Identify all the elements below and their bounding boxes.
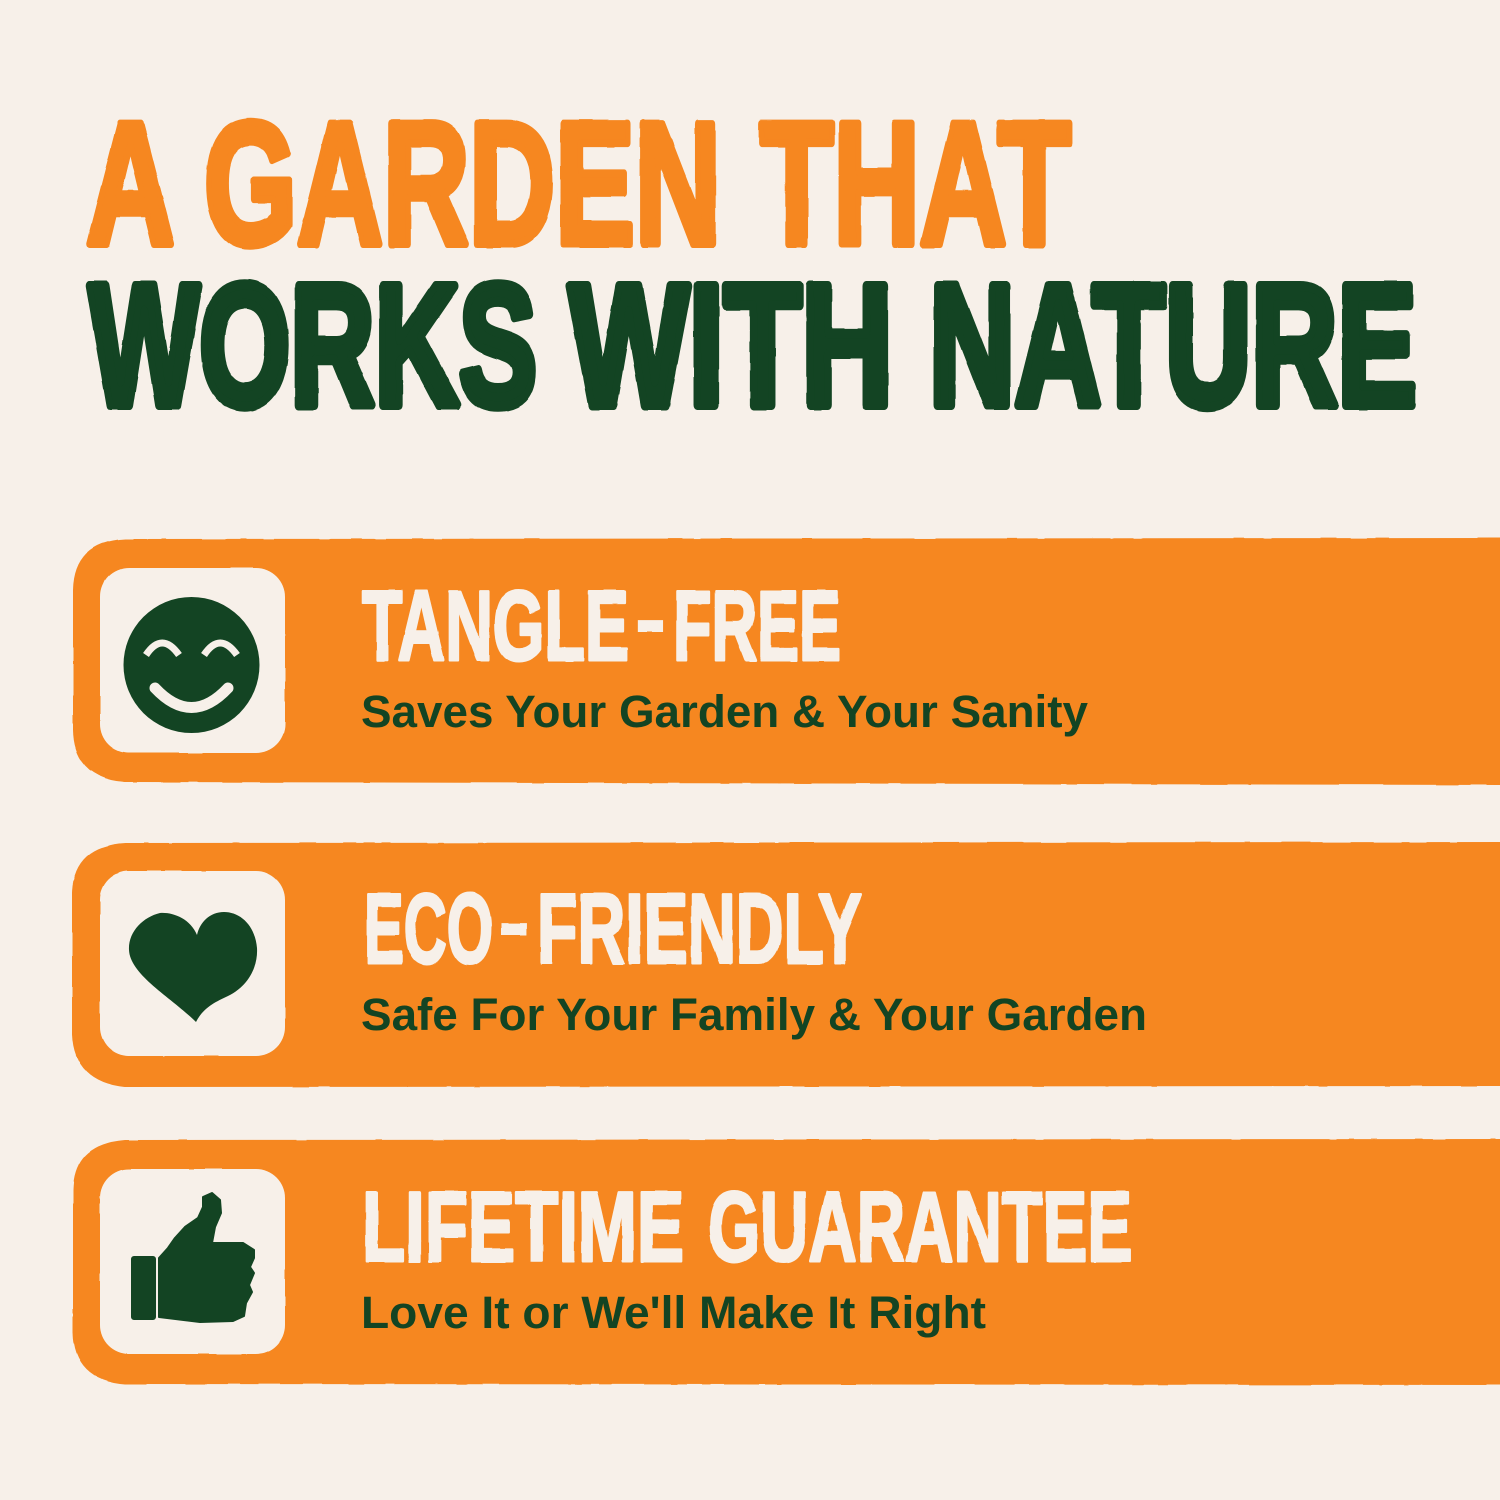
icon tile	[100, 1169, 285, 1354]
orange banner	[73, 538, 1500, 785]
title line 2	[89, 248, 1417, 442]
orange banner	[72, 842, 1500, 1087]
subheading: Love It or We'll Make It Right	[361, 1287, 986, 1338]
heading: GUARANTEE	[708, 1171, 1132, 1282]
title line 1: GARDEN	[204, 87, 721, 282]
subheading: Saves Your Garden & Your Sanity	[361, 686, 1088, 737]
heading	[364, 865, 862, 984]
panel: lifetime guarantee	[73, 1139, 1500, 1385]
heading	[362, 1171, 1132, 1282]
icon: thumbs up	[132, 1193, 254, 1322]
heading: -	[634, 562, 667, 673]
title	[86, 87, 1417, 442]
icon tile	[100, 871, 285, 1056]
title line 2: WITH	[569, 248, 893, 442]
panel: tangle-free	[73, 538, 1500, 785]
icon tile	[100, 568, 285, 753]
title line 1: THAT	[760, 87, 1071, 282]
heading: TANGLE	[362, 570, 629, 681]
heading: LIFETIME	[362, 1171, 684, 1282]
title line 2: WORKS	[89, 248, 537, 442]
heading: FREE	[673, 570, 841, 681]
heading: FRIENDLY	[537, 873, 862, 984]
heading: ECO	[364, 873, 493, 984]
orange banner	[73, 1139, 1500, 1385]
panel: eco-friendly	[72, 842, 1500, 1087]
icon: smiley face	[124, 597, 260, 733]
title line 1: A	[86, 87, 175, 282]
heading: -	[497, 865, 531, 976]
subheading: Safe For Your Family & Your Garden	[361, 989, 1147, 1040]
icon: heart	[129, 912, 257, 1022]
